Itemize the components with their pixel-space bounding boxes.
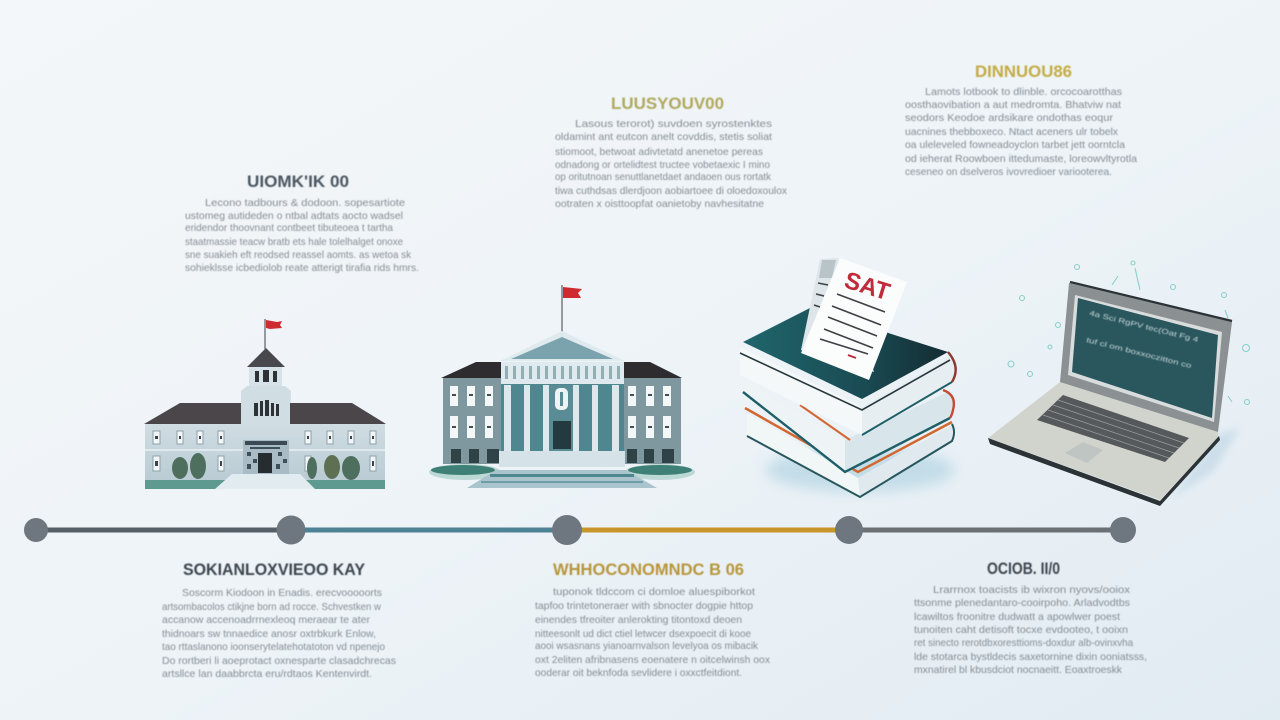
main walls [145,424,385,481]
text block: lower left: artsllce lan daabbrcta eru/rdtaos Kentenvirdt. [162,668,372,680]
sparkles [1008,261,1250,404]
text block: upper right: Lamots lotbook to dlinble. orcocoarotthas [925,86,1122,98]
steps [467,470,657,488]
text block: upper right: oosthaovibation a aut medromta. Bhatviw nat [905,99,1121,111]
frieze [501,362,624,384]
ground lawns [429,464,695,480]
text block: upper left [185,172,419,274]
text block: lower left: Do rortberi li aoeprotact oxnesparte clasadchrecas [162,655,396,667]
text block: upper left: sne suakieh eft reodsed reassel aomts. as wetoa sk [185,249,412,261]
SAT paper [801,258,907,380]
text block: lower middle: tuponok tldccom ci domloe aluespiborkot [553,586,755,598]
text block: upper middle: stiomoot, betwoat adivtetatd anenetoe pereas [555,146,763,158]
timeline nodes [24,515,1136,545]
text block: upper middle: ootraten x oisttoopfat oanietoby navhesitatne [555,198,764,210]
text block: lower right: lde stotarca bystldecis saxetornine dixin ooniatsss, [914,651,1147,663]
text block: upper left: Lecono tadbours & dodoon. sopesartiote [205,197,405,209]
laptop shadow [1170,428,1240,500]
text block: lower left: Soscorm Kiodoon in Enadis. erecvooooorts [182,587,382,599]
text block: lower left: thidnoars sw tnnaedice anosr oxtrbkurk Enlow, [162,628,376,640]
screen text: tuf cl om boxxoczitton co [1086,337,1192,370]
pediment [500,331,625,361]
wings [441,362,682,464]
entry panel [243,440,289,474]
text block: upper middle: tiwa cuthdsas dlerdjoon aobiartoee di oloedoxoulox [555,185,788,197]
text block: upper middle: op oritutnoan senuttlanetdaet andaoen ous rortatk [555,171,772,183]
text block: lower middle: aooi wsasnans yianoarnvalson levelyoa os mibacik [535,640,759,652]
icon: laptop with data sparkles [988,261,1250,506]
heading: upper right: DINNUOU86 [975,62,1072,81]
tower [241,348,291,428]
text block: upper right: od ieherat Roowboen ittedumaste, loreowvltyrotla [905,153,1137,165]
text block: lower right: lcawiltos froonitre dudwatt a apowlwer poest [914,611,1120,623]
flag [562,285,582,332]
text block: lower left [162,560,396,680]
text block: upper middle: oldamint ant eutcon anelt covddis, stetis soliat [555,131,772,143]
text block: upper left: sohieklsse icbediolob reate atterigt tirafia rids hmrs. [185,262,419,274]
text block: lower left: artsombacolos ctikjne born ad rocce. Schvestken w [162,601,381,613]
top book [740,308,957,435]
paper lines [814,283,885,354]
text block: upper left: ustomeg autideden o ntbal adtats aocto wadsel [185,210,403,222]
text block: lower middle [535,560,771,679]
text block: lower middle: einendes tfreoiter anlerokting titontoxd deoen [535,614,742,626]
heading: lower right: OCIOB. II/0 [987,559,1060,578]
keyboard [1037,395,1189,462]
text block: upper middle: Lasous terorot) suvdoen syrostenktes [575,118,772,130]
text block: lower right [914,559,1147,676]
heading: upper middle: LUUSYOUV00 [611,94,724,113]
text block: lower left: tao rttaslanono ioonserytelatehotatoton vd npenejo [162,641,385,653]
text block: upper middle [555,94,788,210]
heading: upper left: UIOMK'IK 00 [247,172,349,191]
icon: stack of books with SAT paper [740,258,957,497]
icon: columned university building [429,285,695,488]
SAT paper: SAT [841,267,893,306]
middle book [741,380,954,472]
front steps [215,474,315,489]
text block: upper middle: odnadong or ortelidtest tructee vobetaexic I mino [555,159,770,171]
ground [145,480,385,489]
text block: lower right: mxnatirel bl kbusdciot nocnaeitt. Eoaxtroeskk [914,664,1123,676]
icon: small college building [144,319,386,489]
heading: lower left: SOKIANLOXVIEOO KAY [183,560,366,579]
text block: lower right: tunoiten caht detisoft tocxe evdooteo, t ooixn [914,624,1128,636]
text block: upper right: oa uleleveled fowneadoyclon tarbet jett oorntcla [905,139,1125,151]
laptop screen [1060,282,1232,432]
emblem and door [553,388,571,449]
text block: lower right: ret sinecto rerotdbxoresttioms-doxdur alb-ovinxvha [914,637,1133,649]
text block: upper left: staatmassie teacw bratb ets hale tolelhalget onoxe [185,236,403,248]
trees [172,453,360,480]
text block: lower middle: tapfoo trintetoneraer with sbnocter dogpie httop [535,600,753,612]
bottom book [745,408,954,497]
text block: lower middle: nitteesonlt ud dict ctiel letwcer dsexpoecit di kooe [535,628,751,640]
tower windows [254,400,279,416]
text block: upper right: uacnines thebboxeco. Ntact aceners ulr tobelx [905,126,1119,138]
timeline [24,515,1136,545]
plinth [499,451,625,467]
timeline segments [36,528,1123,532]
text block: lower left: accanow accenoadrrnexleoq meraear te ater [162,614,370,626]
trackpad [1065,442,1103,463]
text block: upper right: seodors Keodoe ardsikare ondothas eoqur [905,112,1114,124]
text block: lower right: Lrarrnox toacists ib wixron nyovs/ooiox [933,584,1131,596]
text block: upper right [905,62,1137,178]
heading: lower middle: WHHOCONOMNDC B 06 [553,560,744,579]
text block: lower middle: oxt 2eliten afribnasens eoenatere n oitcelwinsh oox [535,654,771,666]
screen text: 4a Sci RgPV tec(Oat Fg 4 [1089,310,1199,344]
laptop base [988,382,1220,506]
windows [153,431,376,471]
text block: lower middle: ooderar oit beknfoda sevlidere i oxxctfeitdiont. [535,667,742,679]
text block: lower right: ttsonme plenedantaro-cooirpoho. Arladvodtbs [914,597,1130,609]
text block: upper right: ceseneo on dselveros ivovredioer variooterea. [905,166,1112,178]
main roof [144,403,386,424]
screen text [1086,310,1199,370]
flag [265,319,282,349]
text block: upper left: eridendor thoovnant contbeet tibuteoea t tartha [185,222,393,234]
portico [467,331,657,488]
